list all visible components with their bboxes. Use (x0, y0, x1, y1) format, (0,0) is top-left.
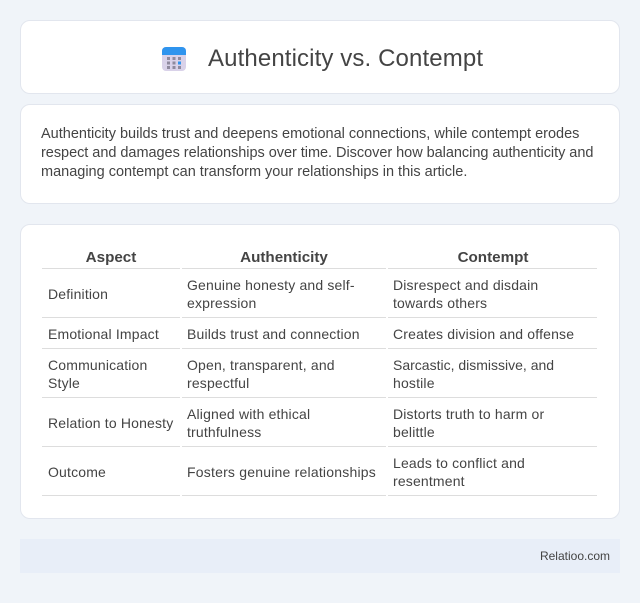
intro text: respect and damages relationships over time. Discover how balancing authenticity and (41, 145, 593, 161)
row: Communication Style: Sarcastic, dismissive, and (393, 357, 554, 373)
row: Relation to Honesty: Aligned with ethical (187, 406, 310, 422)
row: Emotional Impact (48, 326, 574, 342)
row: Emotional Impact: Builds trust and connection (187, 326, 360, 342)
panel: header (20, 20, 620, 94)
intro text: managing contempt can transform your relationships in this article. (41, 164, 467, 180)
icon: calendar (162, 47, 186, 71)
table header (86, 249, 528, 266)
row: Outcome (48, 455, 525, 489)
row: Definition: expression (187, 295, 256, 311)
table header: Authenticity (240, 249, 328, 266)
row: Definition (48, 277, 538, 311)
row: Relation to Honesty: Distorts truth to harm or (393, 406, 544, 422)
intro text (41, 126, 593, 180)
row: Relation to Honesty: Relation to Honesty (48, 415, 173, 431)
row: Emotional Impact: Emotional Impact (48, 326, 159, 342)
row: Definition: Disrespect and disdain (393, 277, 538, 293)
intro text: Authenticity builds trust and deepens emotional connections, while contempt erodes (41, 126, 579, 142)
table header: Contempt (458, 249, 528, 266)
table header: Aspect (86, 249, 136, 266)
row: Emotional Impact: Creates division and offense (393, 326, 574, 342)
row: Communication Style (48, 357, 554, 391)
row: Definition: Genuine honesty and self- (187, 277, 355, 293)
row: Communication Style: respectful (187, 375, 249, 391)
row: Communication Style: Style (48, 375, 80, 391)
row: Communication Style: Open, transparent, and (187, 357, 335, 373)
row: Outcome: Outcome (48, 464, 106, 480)
footer credit: Relatioo.com (540, 549, 610, 563)
panel: comparison table (20, 224, 620, 519)
row: Outcome: resentment (393, 473, 465, 489)
row: Communication Style: Communication (48, 357, 147, 373)
footer (20, 539, 620, 573)
row: Relation to Honesty (48, 406, 544, 440)
row: Outcome: Leads to conflict and (393, 455, 525, 471)
row: Relation to Honesty: belittle (393, 424, 435, 440)
row: Communication Style: hostile (393, 375, 435, 391)
title: Authenticity vs. Contempt (208, 45, 483, 72)
panel: intro (20, 104, 620, 204)
row: Definition: Definition (48, 286, 108, 302)
row: Outcome: Fosters genuine relationships (187, 464, 376, 480)
row: Relation to Honesty: truthfulness (187, 424, 261, 440)
row: Definition: towards others (393, 295, 487, 311)
